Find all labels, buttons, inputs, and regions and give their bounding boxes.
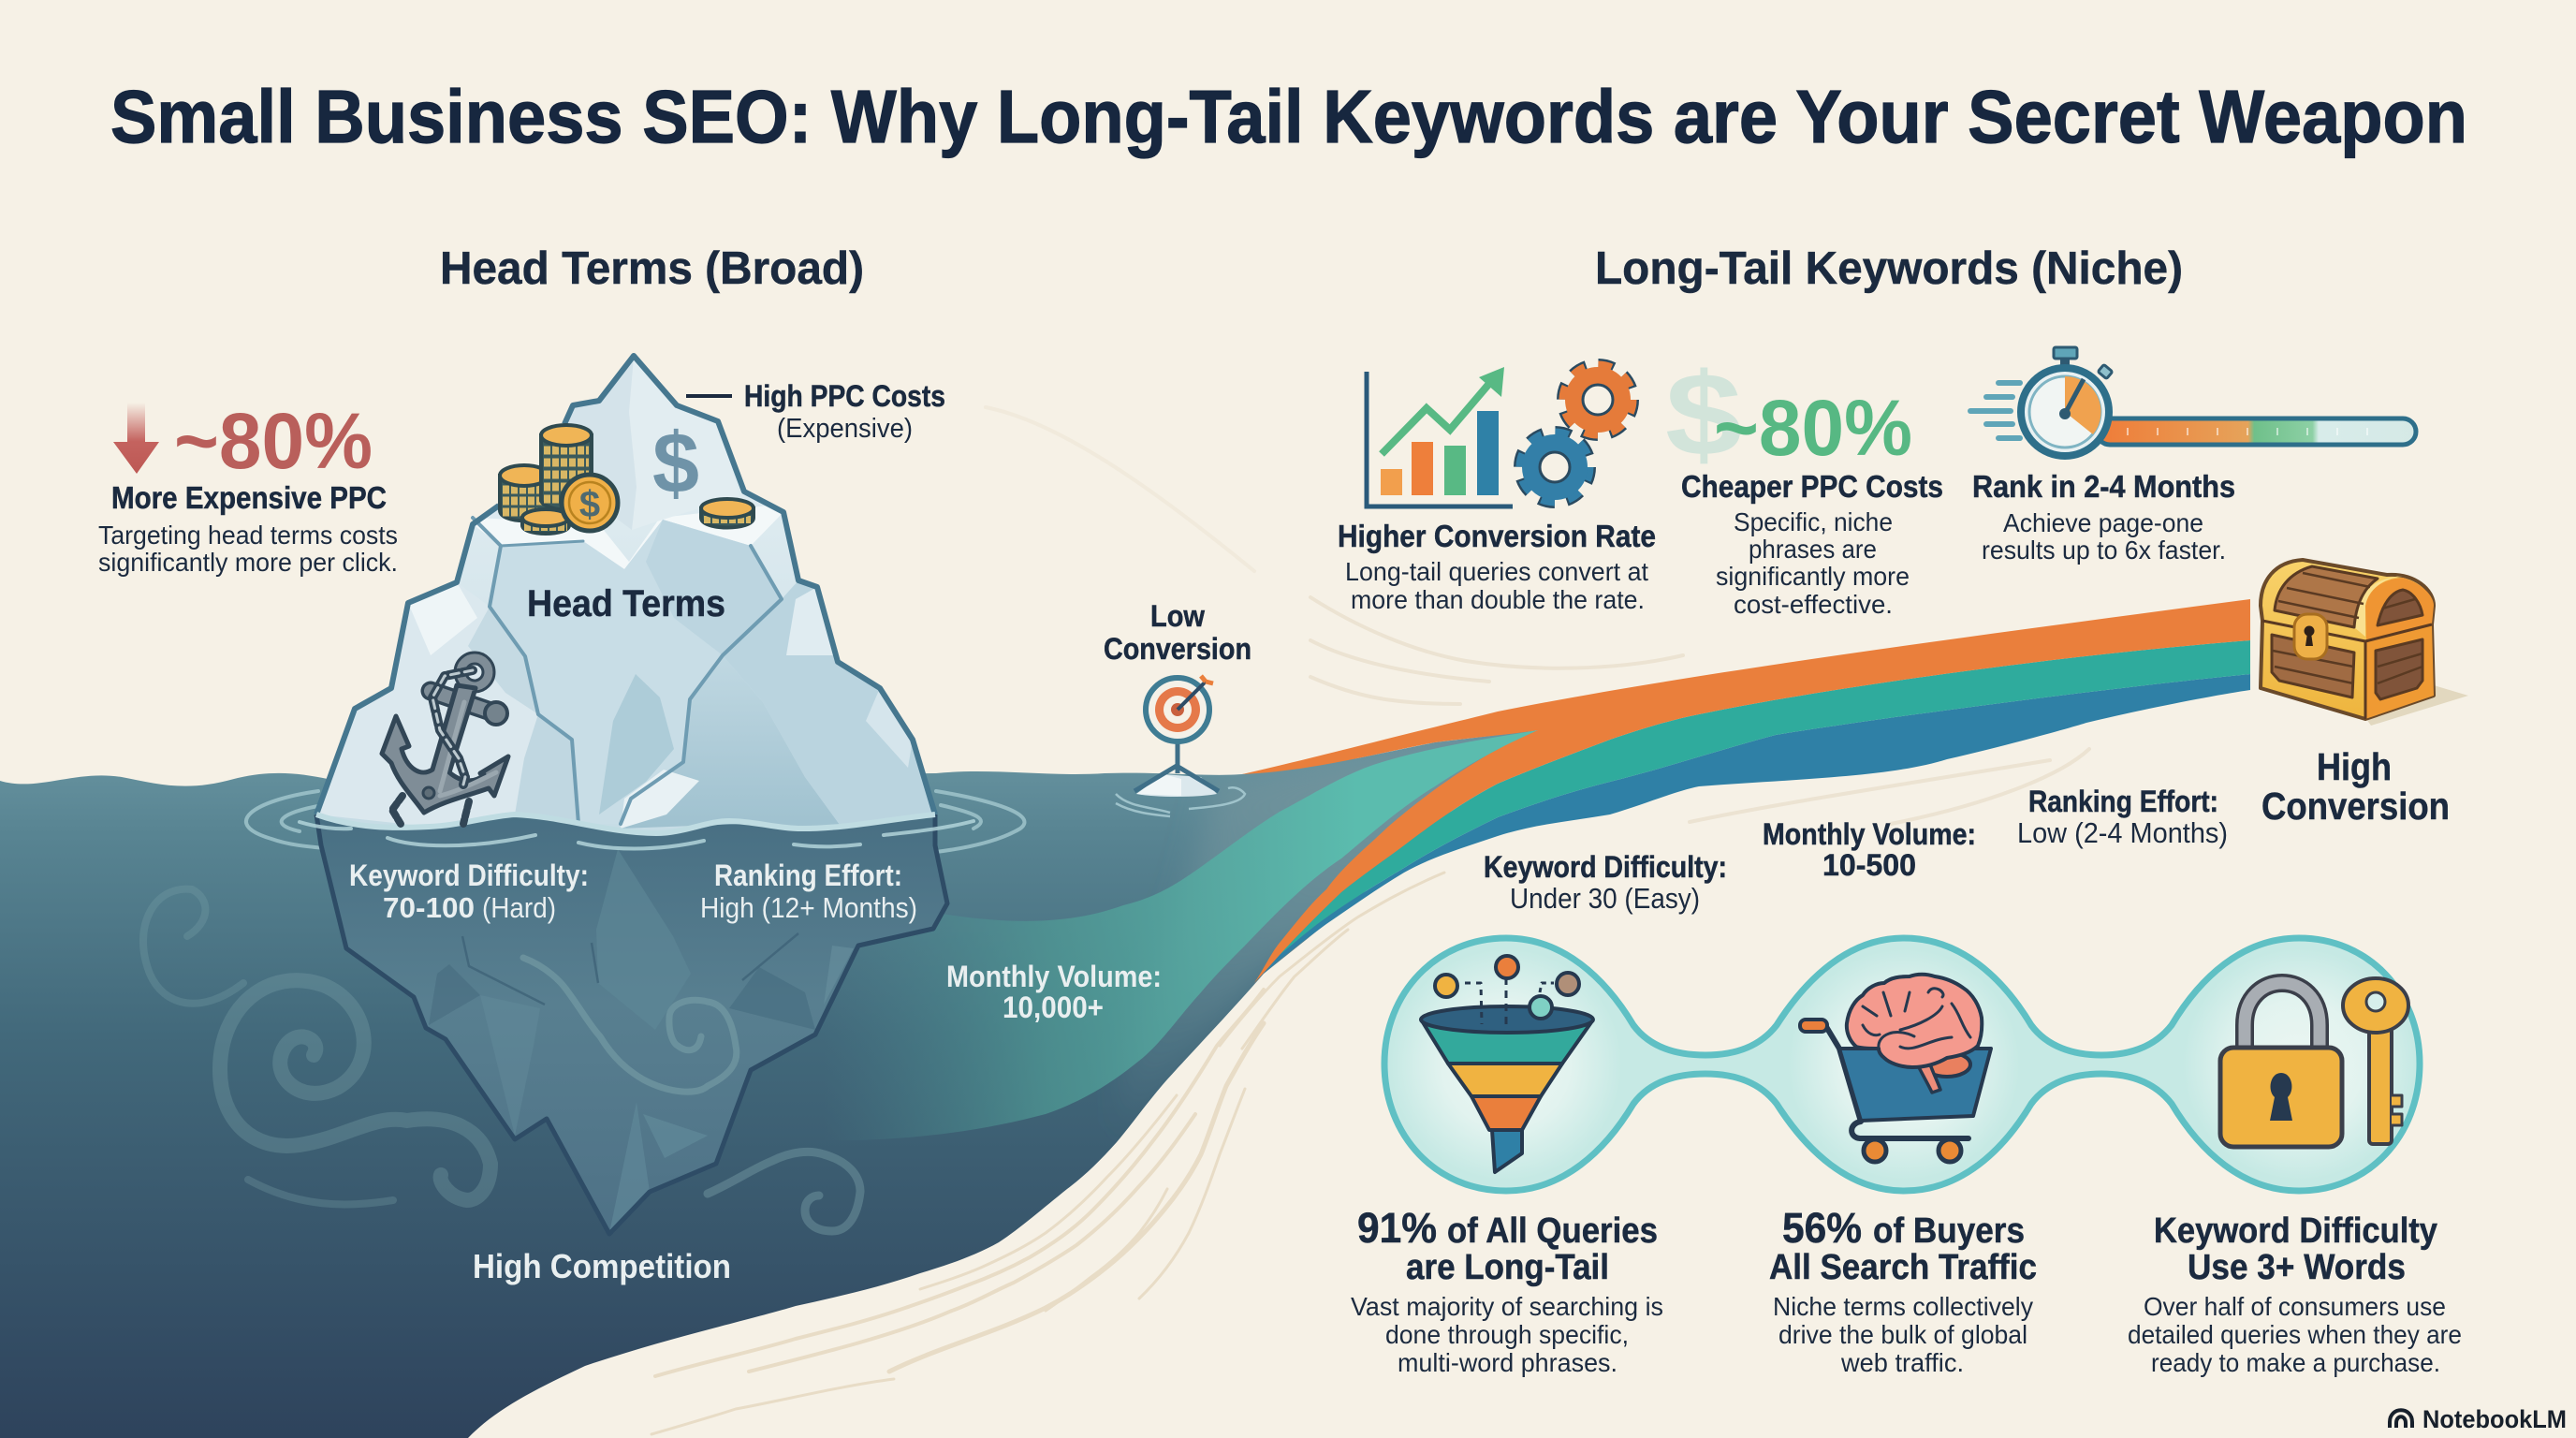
text: long-tail monthly volume: 10-500 [1822,848,1916,882]
coin dollar mark: $ [579,484,600,525]
text: head terms ranking effort: High (12+ Months) [700,891,917,924]
connected bubble capsule [1384,938,2420,1191]
water highlight strokes under the waterline [300,821,973,848]
feature: buyers and search traffic: of Buyers [1873,1211,2025,1251]
stat: higher conversion rate: more than double the rate. [1351,585,1645,614]
stat: cheaper PPC costs: cost-effective. [1734,590,1893,619]
feature: buyers and search traffic: drive the bulk of global [1778,1320,2027,1349]
swirl shapes in the water [143,889,860,1231]
icon: orange gear [1564,366,1632,433]
faint flow lines above ribbon [986,407,2089,824]
icon: blue gear [1521,433,1588,501]
ribbon: teal band [1280,640,2250,955]
label: high competition: High Competition [473,1247,731,1285]
feature: long-tail queries share: 91% [1357,1204,1437,1252]
stat: more expensive PPC [98,397,398,577]
feature: long-tail queries share: are Long-Tail [1406,1248,1609,1287]
stat: more expensive PPC: Targeting head terms costs [98,521,398,550]
stat: higher conversion rate [1338,519,1656,614]
feature: keyword difficulty [2128,1211,2462,1377]
label: low conversion [1104,599,1251,666]
text: head terms monthly volume [946,960,1162,1024]
callout: high PPC costs [686,379,945,444]
stat: more expensive PPC: significantly more per click. [98,548,398,577]
text: head terms monthly volume: Monthly Volume: [946,960,1162,993]
stat: rank in 2-4 months: Rank in 2-4 Months [1972,469,2235,504]
text: head terms keyword difficulty [349,858,589,924]
text: long-tail keyword difficulty [1484,850,1727,915]
text: long-tail keyword difficulty: Keyword Difficulty: [1484,850,1727,884]
icon: anchor [382,658,508,824]
text: head terms keyword difficulty: Keyword Difficulty: [349,858,589,892]
label: low conversion: Conversion [1104,632,1251,666]
stat: cheaper PPC costs: Cheaper PPC Costs [1681,469,1943,504]
feature: keyword difficulty: Use 3+ Words [2188,1248,2406,1287]
grey-blue water strip beside the ribbon [1142,738,1479,1068]
text: long-tail monthly volume: Monthly Volume: [1763,817,1976,851]
icon: shopping cart with brain [1800,975,1991,1162]
icon: pale dollar sign: $ [1665,348,1742,480]
text: long-tail ranking effort: Low (2-4 Months) [2017,816,2228,849]
callout: high PPC costs: High PPC Costs [744,379,945,413]
ribbon: orange band [1242,599,2250,983]
label: high conversion: Conversion [2261,785,2450,828]
teal swoosh in water [824,730,1538,1140]
stat: more expensive PPC: ~80% [174,397,373,485]
stat: higher conversion rate: Long-tail queries convert at [1345,557,1648,586]
stat: cheaper PPC costs: ~80% [1714,384,1912,472]
stat: higher conversion rate: Higher Conversion Rate [1338,519,1656,553]
icon: red down arrow [113,403,159,474]
feature: buyers and search traffic: 56% [1782,1204,1862,1252]
heading: long-tail keywords: Long-Tail Keywords (Niche) [1595,243,2183,294]
ribbon: blue band [1264,674,2250,974]
icon: target on mini iceberg [1116,676,1245,816]
icon: progress bar [2097,418,2416,445]
text: long-tail monthly volume [1763,817,1976,882]
feature: keyword difficulty: Keyword Difficulty [2154,1211,2437,1251]
icon: bar chart with rising arrow [1367,367,1513,506]
feature: keyword difficulty: detailed queries when they are [2128,1320,2462,1349]
text: long-tail keyword difficulty: Under 30 (Easy) [1510,882,1700,915]
icon: funnel [1421,956,1593,1172]
feature: buyers and search traffic: web traffic. [1840,1348,1964,1377]
stat: cheaper PPC costs: phrases are [1749,535,1877,564]
label: low conversion: Low [1150,599,1205,633]
text: long-tail ranking effort: Ranking Effort: [2028,785,2218,818]
stat: rank in 2-4 months: results up to 6x faster. [1982,536,2226,565]
text: head terms monthly volume: 10,000+ [1003,990,1104,1024]
text: long-tail ranking effort [2017,785,2228,849]
feature: buyers and search traffic: Niche terms collectively [1773,1292,2033,1321]
icon: dollar sign on iceberg: $ [652,416,699,511]
label: head terms: Head Terms [527,583,725,624]
cream flow lines below the boundary [651,873,1444,1434]
water [0,730,1538,1438]
stat: cheaper PPC costs: significantly more [1716,562,1910,591]
stat: cheaper PPC costs: Specific, niche [1734,507,1893,536]
feature: long-tail queries share: done through specific, [1385,1320,1629,1349]
text: head terms keyword difficulty: 70-100 [383,891,475,924]
feature: long-tail queries share: Vast majority of searching is [1351,1292,1663,1321]
stat: more expensive PPC: More Expensive PPC [111,480,387,515]
icon: coin stacks [500,425,754,534]
stat: rank in 2-4 months [1972,469,2235,565]
text: head terms keyword difficulty: (Hard) [482,891,556,924]
icon: stopwatch [1970,347,2113,456]
icon: treasure chest [2261,560,2468,726]
heading: head terms: Head Terms (Broad) [440,243,864,294]
iceberg: underwater part [316,814,947,1234]
feature: keyword difficulty: Over half of consumers use [2144,1292,2446,1321]
feature: long-tail queries share: of All Queries [1447,1211,1658,1251]
stat: cheaper PPC costs [1665,348,1943,619]
iceberg: above-water part [316,356,935,833]
text: head terms ranking effort: Ranking Effort: [714,858,902,892]
feature: keyword difficulty: ready to make a purchase. [2151,1348,2440,1377]
feature: buyers and search traffic [1769,1204,2037,1377]
logo: NotebookLM: NotebookLM [2422,1405,2567,1433]
icon: padlock and key [2220,978,2408,1147]
stat: rank in 2-4 months: Achieve page-one [2003,508,2203,537]
feature: long-tail queries share [1351,1204,1663,1377]
label: high conversion: High [2317,745,2392,788]
callout: high PPC costs: (Expensive) [777,414,913,444]
text: head terms ranking effort [700,858,917,924]
feature: buyers and search traffic: All Search Traffic [1769,1248,2037,1287]
ripple rings around the iceberg [246,791,1024,852]
label: high conversion [2261,745,2450,828]
feature: long-tail queries share: multi-word phrases. [1398,1348,1617,1377]
